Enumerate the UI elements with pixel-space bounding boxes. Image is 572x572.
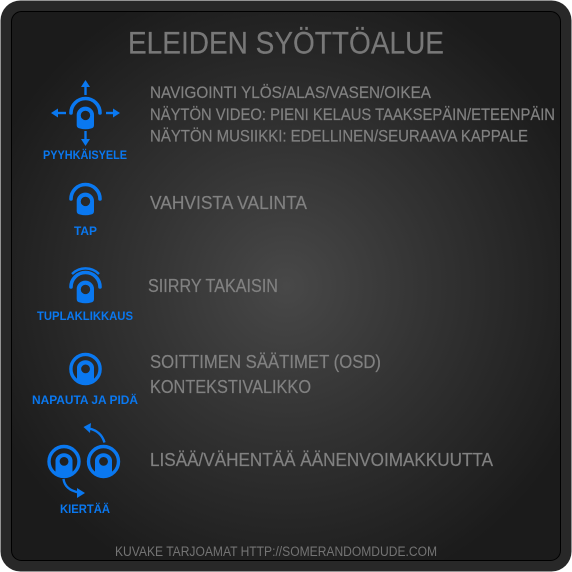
text: tap and hold description: KONTEKSTIVALIKKO: [150, 377, 311, 397]
text: double tap description: SIIRRY TAKAISIN: [148, 276, 278, 296]
text: tap and hold description: [150, 352, 381, 397]
icon: double tap gesture: [71, 268, 100, 303]
icon: tap gesture: [71, 184, 100, 215]
text: swipe description: NÄYTÖN MUSIIKKI: EDELLINEN/SEURAAVA KAPPALE: [150, 128, 528, 146]
icon: swipe gesture: [51, 80, 120, 146]
label: tap and hold: NAPAUTA JA PIDÄ: [32, 394, 138, 407]
title: ELEIDEN SYÖTTÖALUE: [128, 24, 444, 60]
text: swipe description: NAVIGOINTI YLÖS/ALAS/VASEN/OIKEA: [150, 84, 431, 102]
footer credit: KUVAKE TARJOAMAT HTTP://SOMERANDOMDUDE.COM: [115, 544, 437, 559]
text: rotate description: LISÄÄ/VÄHENTÄÄ ÄÄNENVOIMAKKUUTTA: [150, 450, 493, 470]
label: rotate: KIERTÄÄ: [60, 503, 110, 516]
label: double tap: TUPLAKLIKKAUS: [37, 311, 133, 323]
text: tap description: VAHVISTA VALINTA: [150, 193, 307, 213]
icon: rotate gesture: [49, 423, 118, 498]
icon: tap and hold gesture: [71, 354, 100, 384]
label: tap: TAP: [74, 226, 97, 238]
label: swipe: PYYHKÄISYELE: [43, 149, 127, 162]
text: swipe description: [150, 84, 555, 146]
text: tap and hold description: SOITTIMEN SÄÄTIMET (OSD): [150, 352, 381, 372]
